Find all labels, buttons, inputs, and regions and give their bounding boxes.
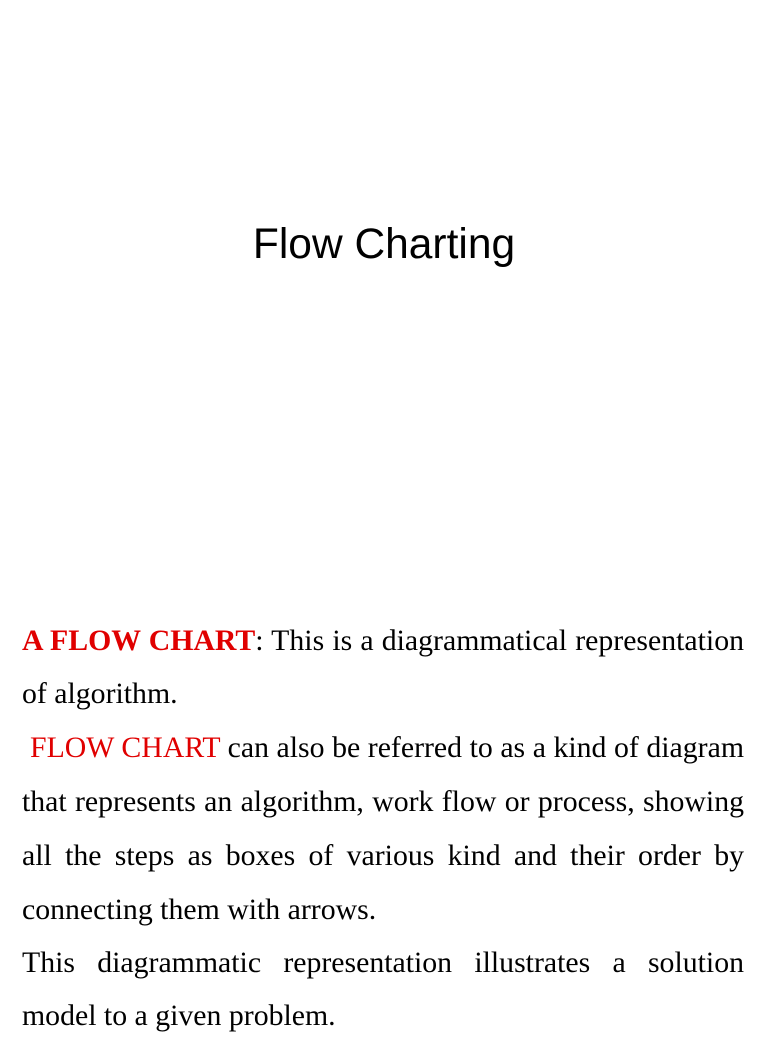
text block: definition: all the steps as boxes of various kind and their order by (22, 839, 744, 872)
text block: definition: of algorithm. (22, 677, 178, 710)
text block: definition (22, 624, 744, 1032)
text block: definition: model to a given problem. (22, 999, 336, 1032)
text block: definition: This diagrammatic representation illustrates a solution (22, 946, 744, 979)
title: Flow Charting (253, 221, 515, 268)
text block: definition: FLOW CHART can also be referred to as a kind of diagram (30, 731, 744, 764)
text block: definition: that represents an algorithm, work flow or process, showing (22, 785, 744, 818)
text block: definition: connecting them with arrows. (22, 893, 376, 926)
text block: definition: A FLOW CHART: This is a diagrammatical representation (22, 624, 744, 657)
